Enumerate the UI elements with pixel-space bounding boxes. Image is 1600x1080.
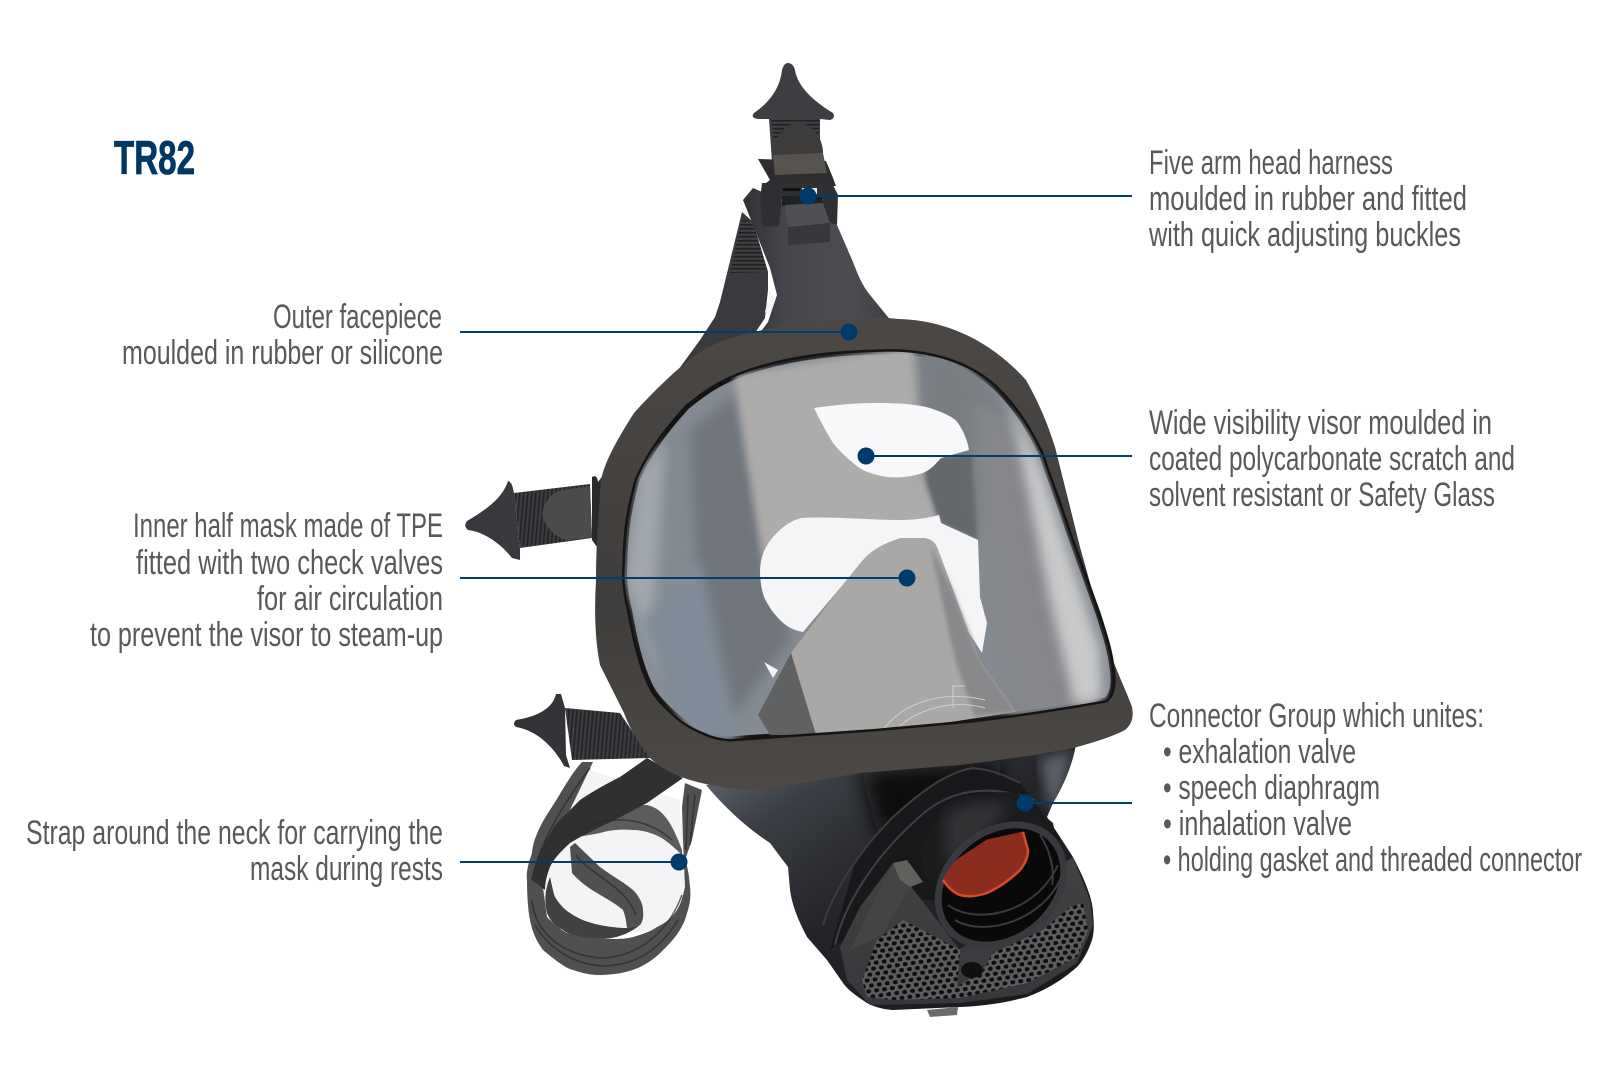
diagonal strap band xyxy=(532,758,683,890)
lower buckle frame xyxy=(760,183,838,227)
buckle flap xyxy=(773,123,823,155)
rear head strap xyxy=(665,212,768,388)
upper buckle flap xyxy=(542,486,592,540)
top buckle assembly with arrowhead xyxy=(743,63,892,350)
gap in rear strap xyxy=(765,292,777,319)
centre spine xyxy=(960,946,993,970)
buckle plate xyxy=(758,159,836,186)
glass shading xyxy=(625,440,665,690)
strap loop inner sheen xyxy=(540,770,686,935)
callout line: inner half mask xyxy=(460,570,916,586)
inner half mask xyxy=(791,538,1016,737)
text block: connector group list xyxy=(1149,697,1582,879)
lower side strap with arrowhead xyxy=(514,694,650,768)
text block: neck strap xyxy=(26,814,443,888)
title: TR82 xyxy=(114,131,195,184)
callout line: visor xyxy=(858,448,1132,464)
facepiece frame xyxy=(595,318,1133,790)
small white reflection xyxy=(764,662,778,678)
text block: inner half mask: Inner half mask made of TPE xyxy=(133,507,443,545)
visor xyxy=(625,345,1113,745)
text block: inner half mask: to prevent the visor to steam-up xyxy=(90,616,443,654)
text block: connector group list: • inhalation valve xyxy=(1163,805,1352,843)
collar rings xyxy=(823,768,1035,945)
grille right xyxy=(957,903,1088,998)
text block: visor xyxy=(1149,404,1515,514)
text block: head harness: moulded in rubber and fitted xyxy=(1149,180,1467,218)
text block: neck strap: mask during rests xyxy=(250,850,443,888)
text block: head harness: Five arm head harness xyxy=(1149,144,1393,182)
text block: inner half mask xyxy=(90,507,443,654)
grille plate xyxy=(840,857,1093,1005)
text block: connector group list: • exhalation valve xyxy=(1163,733,1356,771)
centre screw hole xyxy=(961,962,983,978)
cylinder rim xyxy=(909,795,1093,975)
callout line: outer facepiece xyxy=(460,324,858,340)
back arc of strap xyxy=(577,805,682,855)
harness arm xyxy=(743,188,892,350)
top arrowhead tab xyxy=(753,63,834,162)
strap ridges xyxy=(532,768,695,966)
neck carrying strap xyxy=(527,758,702,975)
collar region xyxy=(830,768,1060,950)
threaded cylinder xyxy=(920,792,1060,900)
text block: outer facepiece: Outer facepiece xyxy=(273,298,442,336)
text block: visor: Wide visibility visor moulded in xyxy=(1149,404,1492,442)
text block: neck strap: Strap around the neck for carrying the xyxy=(26,814,443,852)
text block: head harness xyxy=(1148,144,1467,254)
inner valve arcs xyxy=(884,686,986,728)
white reflection middle xyxy=(760,515,987,653)
text block: connector group list: • speech diaphragm xyxy=(1163,769,1380,807)
grille left xyxy=(862,920,960,1000)
speckled tab xyxy=(893,860,923,887)
dark block behind mask xyxy=(911,353,1009,514)
right glass region xyxy=(975,400,1105,720)
connector group xyxy=(823,768,1093,1005)
slider xyxy=(785,203,830,227)
rear strap ribs xyxy=(730,218,768,273)
upper side strap with arrowhead xyxy=(465,474,612,560)
text block: outer facepiece xyxy=(122,298,443,372)
text block: inner half mask: fitted with two check valves xyxy=(136,544,443,582)
callout line: neck strap xyxy=(460,854,688,870)
callout line: head harness xyxy=(800,188,1132,204)
text block: outer facepiece: moulded in rubber or silicone xyxy=(122,334,443,372)
white reflection top xyxy=(814,403,969,477)
folded S-band of strap xyxy=(570,843,643,928)
text block: head harness: with quick adjusting buckles xyxy=(1148,216,1461,254)
thread lines xyxy=(948,835,1062,927)
speckled band xyxy=(850,863,910,950)
red valve xyxy=(943,832,1028,896)
bottom tab xyxy=(927,1007,958,1017)
mask photograph illustration xyxy=(465,63,1133,1017)
central light band xyxy=(734,345,940,575)
upper strap gasket xyxy=(592,474,612,547)
connector body below the frame xyxy=(706,745,1094,1010)
callout line: connector group xyxy=(1016,794,1132,812)
lower inner fold of strap xyxy=(545,877,640,938)
text block: inner half mask: for air circulation xyxy=(257,580,443,618)
